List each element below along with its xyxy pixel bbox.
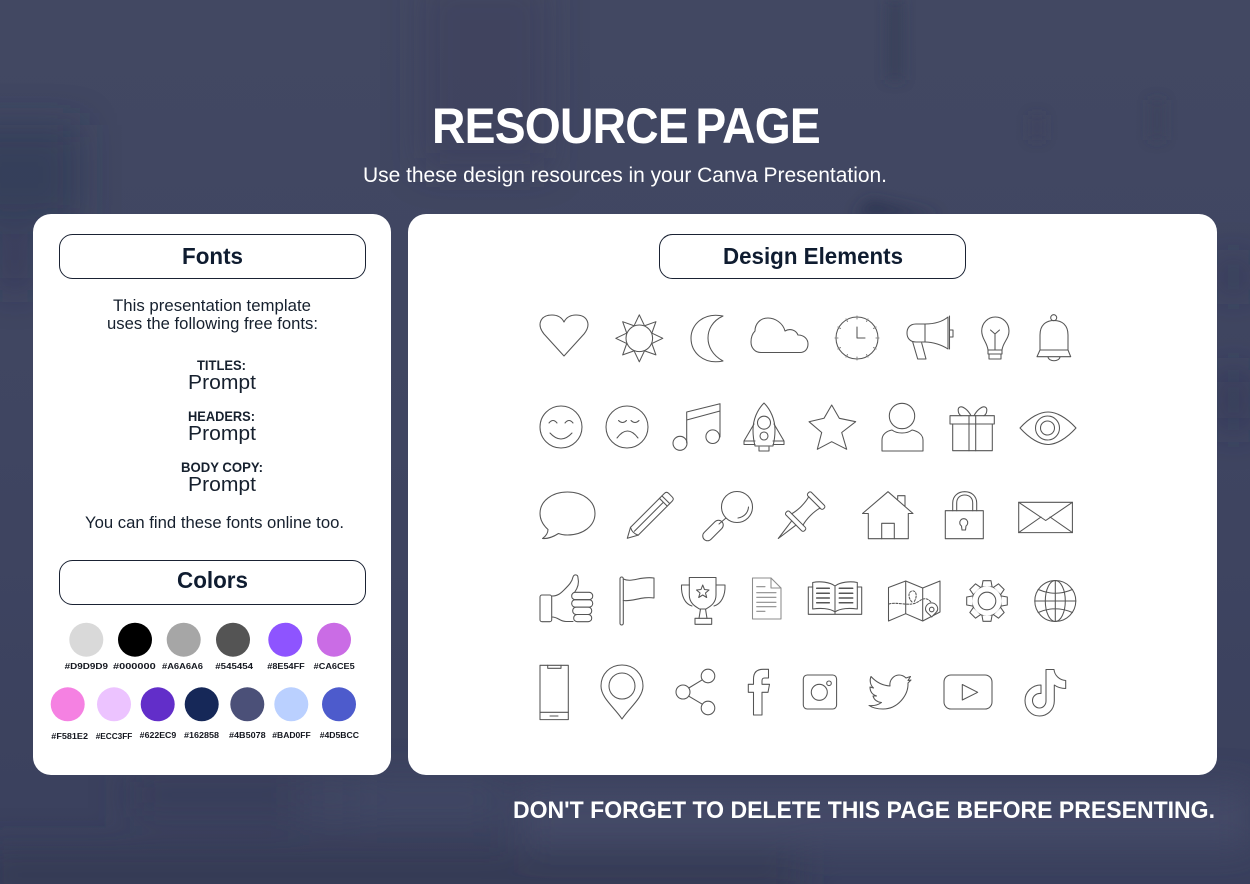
icon: thumbs up (540, 575, 593, 622)
icon: megaphone (907, 316, 953, 359)
icon: document (752, 578, 781, 619)
panel: design elements (408, 214, 1217, 775)
icon: tiktok (1025, 670, 1066, 716)
icon: twitter (869, 675, 911, 709)
color swatches: #8E54FF (267, 661, 305, 671)
icon: padlock (945, 492, 983, 539)
heading: design elements (660, 234, 966, 278)
text: body copy font: Prompt (188, 474, 256, 496)
text: titles font: TITLES: (197, 358, 246, 373)
color swatches: #000000 (113, 661, 156, 671)
text: font note: You can find these fonts online too. (85, 514, 344, 532)
text: font intro: This presentation template (113, 297, 311, 315)
color swatches: #BAD0FF (272, 730, 311, 740)
color swatches: #F581E2 (51, 731, 88, 741)
text: headers font (188, 409, 256, 445)
icon: open book (808, 582, 862, 614)
color swatches: #D9D9D9 (65, 661, 108, 671)
color swatches: #A6A6A6 (162, 661, 203, 671)
icon: pencil (623, 491, 674, 542)
icon: gear (967, 581, 1007, 621)
heading: fonts (60, 234, 366, 278)
footer note: DON'T FORGET TO DELETE THIS PAGE BEFORE PRESENTING. (513, 797, 1215, 824)
icon: instagram (803, 675, 837, 709)
icon: person (882, 403, 923, 451)
icon: trophy (681, 578, 725, 624)
color swatches: #ECC3FF (96, 731, 132, 741)
text: headers font: HEADERS: (188, 409, 255, 424)
icon: share (676, 669, 715, 715)
icon: clock (835, 316, 879, 360)
color swatches: #545454 (215, 661, 253, 671)
icon: map (888, 581, 940, 621)
panel: fonts and colors (33, 214, 391, 775)
heading: colors (60, 560, 366, 604)
color swatches: #4B5078 (229, 730, 266, 740)
icon: music notes (673, 404, 720, 450)
icon: globe (1035, 580, 1076, 622)
color swatches: #622EC9 (140, 730, 176, 740)
icon: cloud (751, 318, 808, 352)
icon: house (862, 492, 913, 539)
icon: envelope (1019, 502, 1072, 533)
icon: sun (616, 315, 663, 362)
icon: light bulb (982, 317, 1009, 359)
text: titles font: Prompt (188, 372, 256, 394)
icon: speech bubble (540, 492, 595, 539)
icon: gift box (950, 407, 994, 451)
color swatches: #162858 (184, 730, 219, 740)
text: titles font (188, 358, 256, 394)
icon: rocket (744, 403, 784, 451)
text: body copy font (181, 460, 263, 496)
color swatches (51, 623, 360, 741)
icon: moon (691, 315, 723, 362)
icon: youtube (944, 675, 992, 709)
color swatches: #CA6CE5 (314, 661, 355, 671)
text: headers font: Prompt (188, 423, 256, 445)
title: RESOURCE PAGE (432, 98, 820, 154)
icon: heart (540, 315, 588, 356)
heading: design elements: Design Elements (723, 243, 903, 269)
text: font intro (107, 297, 318, 333)
text: body copy font: BODY COPY: (181, 460, 263, 475)
icon: smartphone (540, 665, 568, 720)
color swatches: #4D5BCC (320, 730, 360, 740)
icon: star (809, 405, 856, 449)
icon: push pin (769, 490, 827, 548)
icon: facebook (748, 669, 770, 715)
icon: eye (1020, 412, 1076, 444)
subtitle: Use these design resources in your Canva Presentation. (363, 164, 887, 187)
text: font intro: uses the following free fonts: (107, 315, 318, 333)
icon: bell (1037, 315, 1071, 361)
icon: smiling face (540, 406, 582, 448)
icon: magnifying glass (701, 492, 752, 543)
heading: colors: Colors (177, 567, 248, 593)
heading: fonts: Fonts (182, 243, 243, 269)
icon: flag (620, 577, 654, 625)
icon: sad face (606, 406, 648, 448)
icon: location pin (601, 665, 643, 719)
